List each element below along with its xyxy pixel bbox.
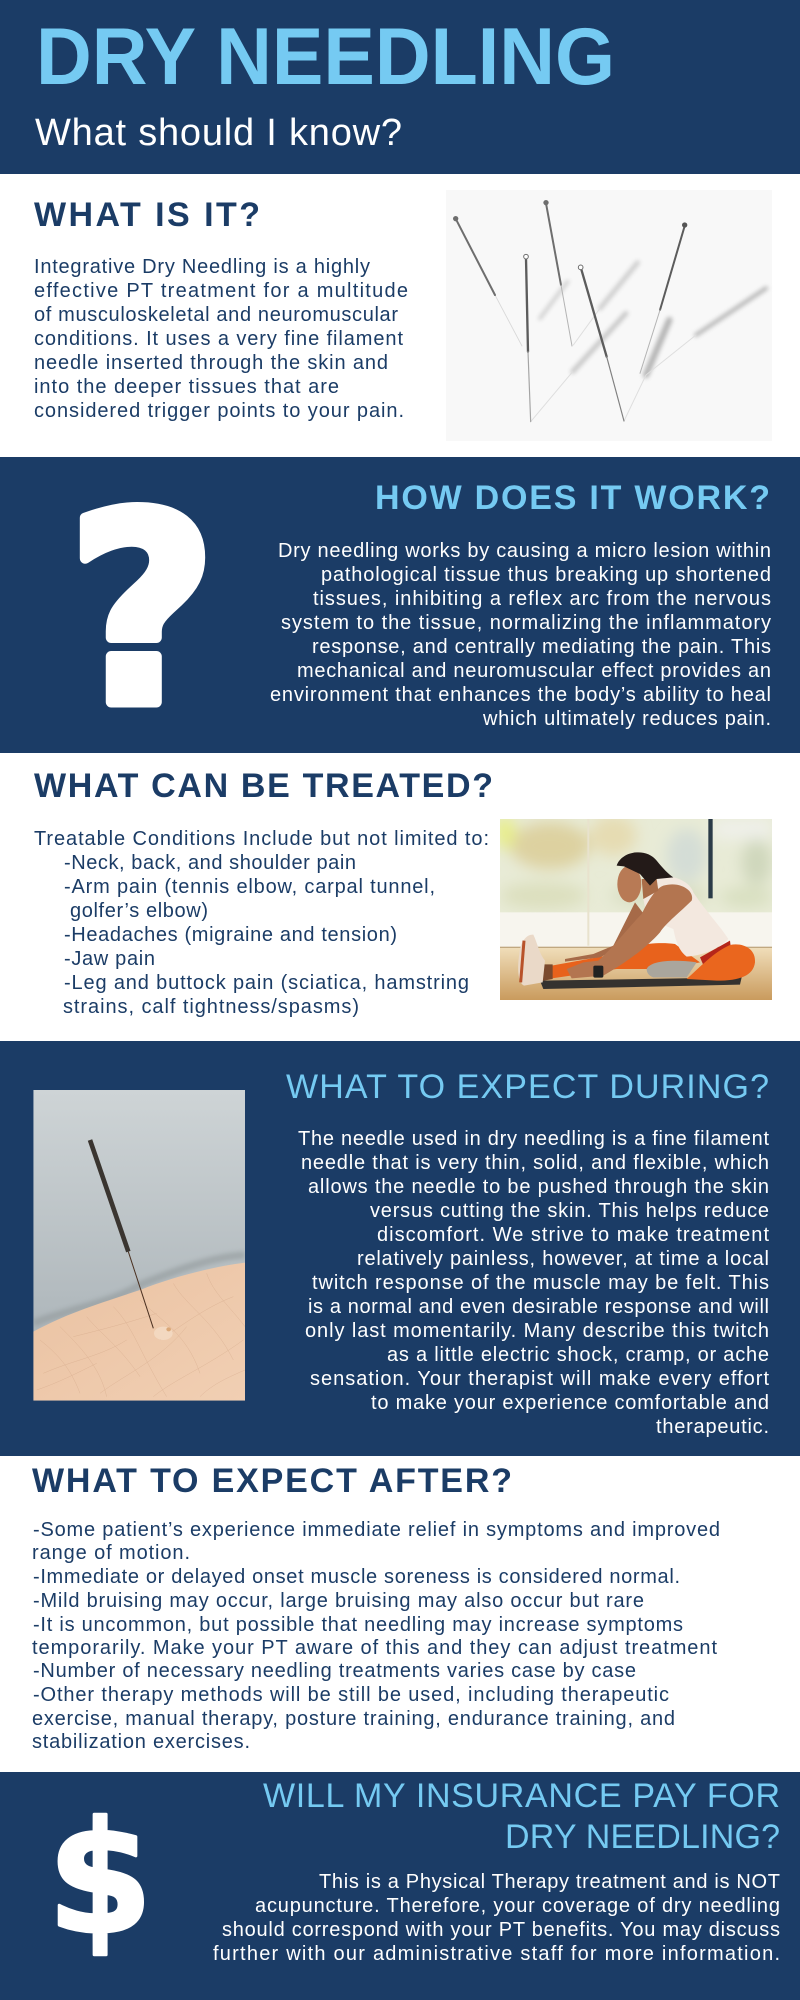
icon: dollar sign: $ [47, 1790, 153, 1969]
text block: treatable conditions: -Leg and buttock pain (sciatica, hamstring [64, 972, 469, 994]
text block: insurance: This is a Physical Therapy treatment and is NOT [319, 1871, 780, 1893]
subtitle: What should I know? [35, 112, 402, 154]
panel: insurance [0, 1772, 800, 2000]
text block: what to expect during: is a normal and even desirable response and will [308, 1296, 769, 1318]
text block: how does it work: mechanical and neuromuscular effect provides an [297, 660, 771, 682]
text block: treatable conditions: -Arm pain (tennis elbow, carpal tunnel, [64, 876, 435, 898]
heading: what to expect during: WHAT TO EXPECT DURING? [286, 1068, 769, 1106]
text block: what to expect during: therapeutic. [656, 1416, 769, 1438]
text block: insurance [213, 1871, 780, 1965]
title: DRY NEEDLING [36, 12, 615, 102]
text block: treatable conditions: -Jaw pain [64, 948, 155, 970]
text block: insurance: further with our administrative staff for more information. [213, 1943, 780, 1965]
text block: what to expect after [32, 1519, 720, 1753]
text block: how does it work: environment that enhances the body’s ability to heal [270, 684, 771, 706]
text block: what to expect during: allows the needle to be pushed through the skin [308, 1176, 769, 1198]
text block: what to expect after: temporarily. Make your PT aware of this and they can adjust treatment [32, 1637, 717, 1659]
heading: will my insurance pay [263, 1777, 780, 1856]
text block: how does it work [270, 540, 771, 730]
text block: what is it: conditions. It uses a very fine filament [34, 328, 403, 350]
image: acupuncture needles [446, 190, 772, 441]
text block: what to expect after: -Immediate or delayed onset muscle soreness is considered normal. [33, 1566, 680, 1588]
text block: what is it: needle inserted through the skin and [34, 352, 388, 374]
text block: what to expect during: needle that is very thin, solid, and flexible, which [301, 1152, 769, 1174]
text block: treatable conditions: -Headaches (migraine and tension) [64, 924, 397, 946]
text block: how does it work: response, and centrally mediating the pain. This [312, 636, 771, 658]
text block: how does it work: system to the tissue, normalizing the inflammatory [281, 612, 771, 634]
text block: what to expect during: as a little electric shock, cramp, or ache [387, 1344, 769, 1366]
text block: what to expect after: -It is uncommon, but possible that needling may increase symptoms [33, 1614, 683, 1636]
heading: how does it work: HOW DOES IT WORK? [375, 479, 770, 517]
text block: treatable conditions: golfer’s elbow) [70, 900, 208, 922]
panel: what to expect during [0, 1041, 800, 1456]
text block: insurance: should correspond with your PT benefits. You may discuss [222, 1919, 780, 1941]
icon: question mark: ? [68, 460, 216, 765]
text block: how does it work: pathological tissue thus breaking up shortened [321, 564, 771, 586]
text block: what is it: considered trigger points to your pain. [34, 400, 404, 422]
text block: treatable conditions: strains, calf tightness/spasms) [63, 996, 359, 1018]
text block: treatable conditions: Treatable Conditions Include but not limited to: [34, 828, 489, 850]
text block: what to expect after: range of motion. [32, 1542, 190, 1564]
text block: how does it work: Dry needling works by causing a micro lesion within [278, 540, 771, 562]
heading: will my insurance pay: DRY NEEDLING? [505, 1818, 780, 1856]
text block: what to expect during: versus cutting the skin. This helps reduce [370, 1200, 769, 1222]
text block: what to expect during: twitch response of the muscle may be felt. This [312, 1272, 769, 1294]
text block: what to expect after: -Number of necessary needling treatments varies case by case [33, 1660, 636, 1682]
image: woman stretching [495, 816, 773, 1001]
panel: header [0, 0, 800, 174]
heading: what can be treated: WHAT CAN BE TREATED? [34, 767, 493, 805]
text block: what to expect during: The needle used in dry needling is a fine filament [298, 1128, 769, 1150]
text block: treatable conditions [34, 828, 489, 1018]
text block: what to expect during: only last momentarily. Many describe this twitch [305, 1320, 769, 1342]
text block: treatable conditions: -Neck, back, and shoulder pain [64, 852, 356, 874]
text block: what is it: of musculoskeletal and neuromuscular [34, 304, 398, 326]
text block: what to expect after: -Mild bruising may occur, large bruising may also occur but rare [33, 1590, 644, 1612]
text block: how does it work: tissues, inhibiting a reflex arc from the nervous [313, 588, 771, 610]
panel: what to expect after [0, 1456, 800, 1772]
text block: what to expect after: -Other therapy methods will be still be used, including therapeutic [33, 1684, 669, 1706]
text block: what to expect after: stabilization exercises. [32, 1731, 250, 1753]
text block: what to expect during: relatively painless, however, at time a local [357, 1248, 769, 1270]
panel: how does it work [0, 457, 800, 765]
text block: what to expect during: discomfort. We strive to make treatment [377, 1224, 769, 1246]
text block: what is it: Integrative Dry Needling is a highly [34, 256, 370, 278]
text block: what to expect during: to make your experience comfortable and [371, 1392, 769, 1414]
panel: what is it [0, 174, 800, 457]
text block: what to expect after: -Some patient’s experience immediate relief in symptoms and improved [33, 1519, 720, 1541]
text block: what to expect after: exercise, manual therapy, posture training, endurance training, and [32, 1708, 675, 1730]
text block: how does it work: which ultimately reduces pain. [482, 708, 771, 730]
text block: what to expect during: sensation. Your therapist will make every effort [310, 1368, 769, 1390]
heading: what is it: WHAT IS IT? [34, 196, 260, 234]
heading: will my insurance pay: WILL MY INSURANCE PAY FOR [263, 1777, 780, 1815]
text block: what is it: into the deeper tissues that are [34, 376, 339, 398]
text block: what is it [34, 256, 408, 422]
panel: what can be treated [34, 773, 772, 1017]
text block: insurance: acupuncture. Therefore, your coverage of dry needling [255, 1895, 780, 1917]
image: needle in arm [33, 1090, 245, 1401]
text block: what is it: effective PT treatment for a multitude [34, 280, 408, 302]
heading: what to expect after: WHAT TO EXPECT AFTER? [32, 1462, 512, 1500]
text block: what to expect during [298, 1128, 769, 1438]
